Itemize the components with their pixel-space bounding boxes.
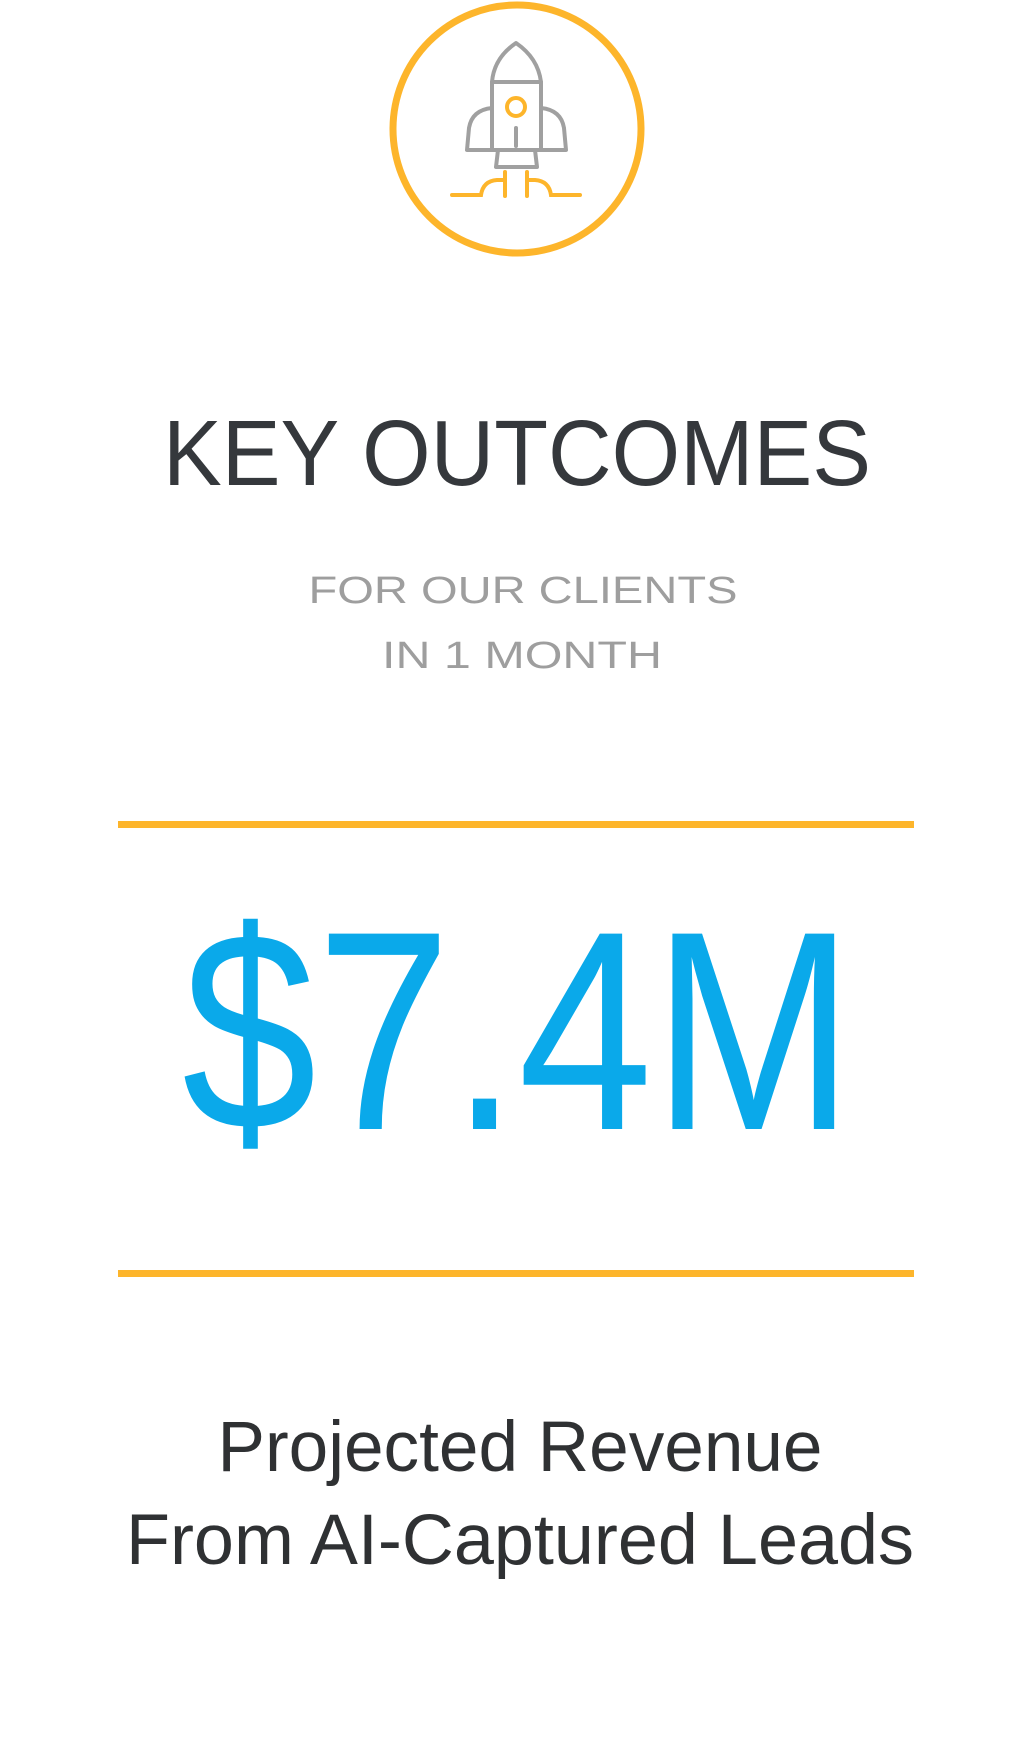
divider bottom [118,1270,914,1277]
subtitle: IN 1 MONTH [382,635,662,677]
title: KEY OUTCOMES [163,401,871,505]
caption: Projected Revenue [218,1408,822,1487]
icon: rocket in circle [393,5,641,253]
caption: From AI-Captured Leads [126,1501,914,1580]
subtitle: FOR OUR CLIENTS [308,570,738,612]
big number: $7.4M [182,873,854,1190]
divider top [118,821,914,828]
caption [126,1408,914,1580]
subtitle [308,570,738,677]
